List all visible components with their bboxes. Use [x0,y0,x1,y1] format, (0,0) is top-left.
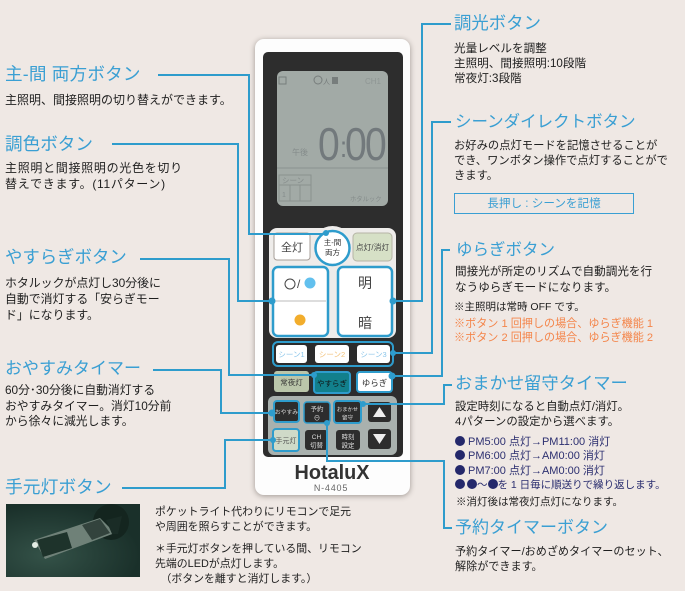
text: おやすみ: 60分･30分後に自動消灯する [5,383,155,397]
button: 予約: ⊖ [314,414,320,422]
text: おまかせ: 設定時刻になると自動点灯/消灯。 [455,400,629,412]
button: おまかせ留守: 留守 [342,414,353,422]
text: 調光: 常夜灯:3段階 [454,72,522,85]
button: CH切替: 切替 [310,440,324,450]
pattern list: PM5:00 点灯→PM11:00 消灯 [468,436,610,448]
note: orange [454,317,653,344]
scene buttons: シーン1 [278,350,305,359]
button: やすらぎ: やすらぎ [317,378,347,388]
LCD screen: CH1 [365,77,382,86]
LCD screen: 0 [345,119,367,171]
button: CH切替: CH [312,434,321,441]
button: おやすみ [274,401,299,422]
text: 予約タイマー: 解除ができます。 [455,560,543,572]
button: 予約 [304,402,330,423]
pattern list: ～ を 1 日毎に順送りで繰り返します。 [477,479,666,491]
remote body [255,39,410,495]
text: 手元灯 note: 先端のLEDが点灯します。 [155,558,284,570]
pattern list: PM6:00 点灯→AM0:00 消灯 [468,450,605,462]
text: 調光 [454,42,586,85]
dark face [263,52,403,457]
heading: おまかせ留守タイマー: おまかせ留守タイマー [455,373,628,393]
button group: brightness: 暗 [358,315,372,331]
button group: color [273,267,328,336]
lower button panel [268,396,397,455]
model number: N-4405 [314,483,348,493]
scene buttons: シーン3 [360,350,387,359]
button: 時刻設定: 設定 [342,442,355,450]
note: orange: ※ボタン 2 回押しの場合、ゆらぎ機能 2 [454,332,653,344]
button: ゆらぎ [357,372,392,392]
scene buttons: シーン2 [319,350,345,359]
button: down [368,429,391,449]
text: 予約タイマー: 予約タイマー/おめざめタイマーのセット、 [455,546,669,558]
button: やすらぎ [314,372,350,393]
text: 手元灯 description [155,506,351,532]
text: 主-間: 主照明、間接照明の切り替えができます。 [5,93,232,107]
text: おやすみ: おやすみタイマー。消灯10分前 [5,399,171,413]
text: やすらぎ: 自動で消灯する「安らぎモー [5,292,160,306]
button: 全灯 [274,233,310,260]
heading: 予約タイマーボタン: 予約タイマーボタン [455,518,608,537]
button: up [368,402,391,422]
button: おまかせ留守 [334,401,361,423]
heading: 手元灯ボタン: 手元灯ボタン [5,477,112,497]
LCD screen: 人 [323,78,330,86]
heading: 調色ボタン: 調色ボタン [5,134,93,154]
button: 主-間両方 [316,231,350,265]
text: シーンダイレクト: でき、ワンボタン操作で点灯することがで [454,155,668,167]
button group: color: / [297,277,301,291]
button: 点灯/消灯: 点灯/消灯 [356,242,389,252]
note: orange: ※ボタン 1 回押しの場合、ゆらぎ機能 1 [454,318,653,330]
LCD screen: ホタルック [350,194,381,203]
text: シーンダイレクト: お好みの点灯モードを記憶させることが [454,140,657,152]
button: 常夜灯: 常夜灯 [280,377,303,387]
text: ゆらぎ: なうゆらぎモードになります。 [455,281,616,294]
button: 時刻設定: 時刻 [342,432,354,441]
heading: シーンダイレクトボタン: シーンダイレクトボタン [455,113,636,131]
button: ゆらぎ: ゆらぎ [362,378,388,388]
text: ゆらぎ: 間接光が所定のリズムで自動調光を行 [455,265,652,278]
heading: やすらぎボタン: やすらぎボタン [5,247,127,267]
text: やすらぎ [5,276,161,322]
text: おまかせ [455,400,629,428]
text: 調光: 主照明、間接照明:10段階 [454,57,586,70]
text: 調色: 主照明と間接照明の光色を切り [5,161,183,175]
text: やすらぎ: ホタルックが点灯し30分後に [5,276,161,290]
button: 予約: 予約 [310,404,324,413]
text: 手元灯 note: ＊手元灯ボタンを押している間、リモコン [155,543,362,555]
leader dots [268,230,396,443]
heading: おやすみタイマー: おやすみタイマー [5,359,141,378]
brand: HotaluX: HotaluX [294,462,370,484]
LCD screen [277,71,388,206]
heading: 主-間 両方ボタン: 主-間 両方ボタン [5,64,141,84]
LCD screen: : [340,130,347,163]
photo: remote in the dark [6,504,140,577]
text: おやすみ: から徐々に減光します。 [5,414,134,428]
LCD screen: シーン [282,176,304,185]
text: 調色: 替えできます。(11パターン) [5,177,166,191]
text: 調光: 光量レベルを調整 [454,42,547,55]
text: ゆらぎ [455,265,652,294]
button: 手元灯 [273,429,299,451]
callout: 長押し: 長押し : シーンを記憶 [487,197,601,210]
LCD screen: 1 [282,192,286,199]
scene buttons [273,342,393,366]
text: 手元灯 description: や周囲を照らすことができます。 [155,520,317,532]
button: おやすみ: おやすみ [275,408,298,416]
button group: brightness [338,267,392,336]
button group: brightness: 明 [358,275,372,291]
LCD screen: 午後 [292,147,308,157]
text: シーンダイレクト: きます。 [454,170,498,182]
note: 消灯後: ※消灯後は常夜灯点灯になります。 [456,496,623,508]
text: シーンダイレクト [454,139,668,182]
button: 点灯/消灯 [353,233,392,261]
text: おやすみ [5,383,171,428]
button: 主-間両方: 両方 [325,247,340,257]
button: 手元灯: 手元灯 [276,436,296,445]
text: 手元灯 note [155,542,362,585]
button: CH切替 [305,430,328,450]
pattern list: PM7:00 点灯→AM0:00 消灯 [468,464,605,476]
LCD screen: 0 [365,119,387,171]
text: 手元灯 description: ポケットライト代わりにリモコンで足元 [155,506,351,518]
heading: ゆらぎボタン: ゆらぎボタン [456,241,555,259]
button: 時刻設定 [336,430,360,450]
leader lines [112,24,452,528]
pattern list [455,436,666,491]
text: 予約タイマー [455,545,669,572]
LCD screen: 0 [318,119,340,171]
button: 常夜灯 [274,371,309,392]
button panel [269,228,396,338]
text: 調色 [5,161,183,191]
text: おまかせ: 4パターンの設定から選べます。 [455,416,619,428]
button: 主-間両方: 主-間 [324,237,341,247]
text: 手元灯 note: （ボタンを離すと消灯します。） [166,573,317,585]
heading: 調光ボタン: 調光ボタン [454,13,541,33]
button: 全灯: 全灯 [281,240,303,254]
callout: 長押し [454,193,634,214]
note: 主照明: ※主照明は常時 OFF です。 [454,301,585,313]
text: やすらぎ: ド」になります。 [5,308,99,322]
button: おまかせ留守: おまかせ [337,406,358,413]
